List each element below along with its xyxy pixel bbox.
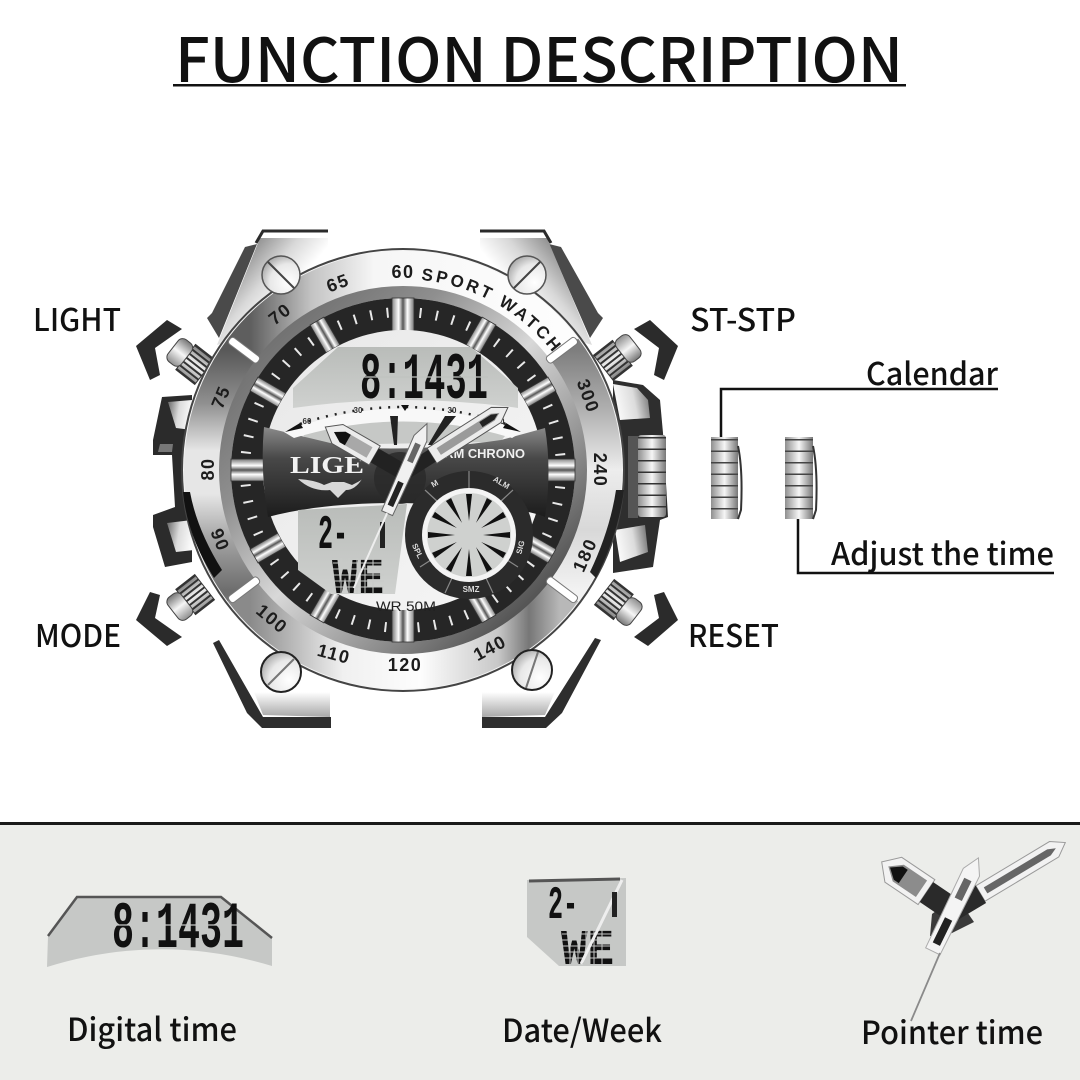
watch lugs	[207, 231, 603, 728]
bezel scale numbers: 90	[206, 526, 234, 554]
label: date week: Date/Week	[502, 1006, 663, 1052]
small seconds scale arc: 60	[496, 417, 505, 426]
small seconds scale arc: 30	[354, 406, 363, 415]
icon: digital time LCD	[47, 892, 272, 967]
chevron: reset	[634, 592, 678, 646]
dial	[263, 330, 548, 614]
pushers	[163, 331, 646, 629]
water resist text: WR 50M	[376, 599, 436, 614]
minute ring ticks	[245, 312, 561, 628]
callout: calendar	[721, 349, 998, 437]
bottom panel	[0, 822, 1080, 1080]
icon: digital time LCD: 8:1431	[112, 892, 244, 967]
callout: calendar: Calendar	[866, 349, 998, 394]
icon: date week LCD: WE	[561, 923, 614, 980]
bezel scale numbers: 140	[470, 631, 510, 665]
bezel scale numbers: 240	[590, 453, 610, 487]
bottom LCD window	[298, 504, 407, 609]
bezel screws	[261, 256, 552, 692]
crown: time position	[785, 437, 817, 519]
bezel scale numbers: 110	[315, 640, 353, 668]
bezel scale numbers: 60	[391, 262, 415, 282]
brand logo	[290, 453, 364, 498]
bezel scale numbers: 65	[324, 270, 352, 296]
small seconds scale arc	[284, 405, 522, 445]
chevron: light	[136, 320, 182, 380]
crown: calendar position	[711, 437, 742, 519]
top LCD window	[293, 347, 518, 408]
right case side	[613, 380, 668, 573]
top LCD digital time	[360, 343, 488, 418]
subdial: ALM	[491, 475, 511, 491]
bezel scale numbers: 75	[207, 383, 235, 411]
chevron: st-stp	[634, 320, 678, 380]
callout: adjust the time: Adjust the time	[831, 529, 1054, 574]
bezel white notches	[227, 336, 579, 604]
subdial: SIG	[514, 540, 527, 555]
dial dark band	[263, 427, 548, 517]
chevron: mode	[136, 592, 182, 646]
label: st-stp: ST-STP	[690, 295, 796, 340]
subdial: SMZ	[463, 585, 480, 594]
bottom LCD window: 2-	[318, 509, 348, 563]
subdial	[405, 471, 533, 599]
dial grey panel under scale	[300, 416, 510, 445]
bezel scale numbers: 120	[388, 655, 422, 675]
bezel scale numbers	[198, 262, 610, 675]
hour indices	[231, 298, 575, 642]
label: light: LIGHT	[33, 295, 121, 340]
left case side	[153, 395, 194, 567]
chrono label: ARM CHRONO	[435, 446, 525, 461]
label: pointer time: Pointer time	[861, 1008, 1043, 1054]
bezel scale numbers: 80	[198, 457, 218, 481]
bezel scale numbers: 100	[252, 600, 292, 638]
bezel	[181, 248, 625, 692]
subdial: M	[430, 478, 440, 489]
crown on case	[638, 435, 666, 517]
label: reset: RESET	[688, 611, 779, 656]
watch illustration	[153, 230, 668, 728]
bezel scale numbers: 300	[573, 376, 603, 416]
icon: pointer hands	[873, 833, 1071, 1021]
brand logo: LIGE	[290, 453, 364, 479]
bezel scale numbers: 70	[265, 299, 295, 329]
small seconds scale arc: 60	[303, 417, 312, 426]
bezel scale numbers: 180	[569, 535, 601, 575]
bezel scale numbers: SPORT WATCH	[422, 268, 561, 352]
small seconds scale arc: 30	[448, 406, 457, 415]
label: digital time: Digital time	[67, 1005, 237, 1051]
icon: date week LCD: 2-	[548, 880, 578, 932]
label: mode: MODE	[35, 611, 121, 656]
bottom LCD window: WE	[332, 552, 384, 609]
top LCD digital time: 8:1431	[360, 343, 488, 418]
icon: date week LCD	[527, 878, 626, 980]
title: FUNCTION DESCRIPTION	[175, 11, 903, 100]
watch hands	[320, 400, 513, 591]
subdial: SPL	[410, 542, 425, 560]
